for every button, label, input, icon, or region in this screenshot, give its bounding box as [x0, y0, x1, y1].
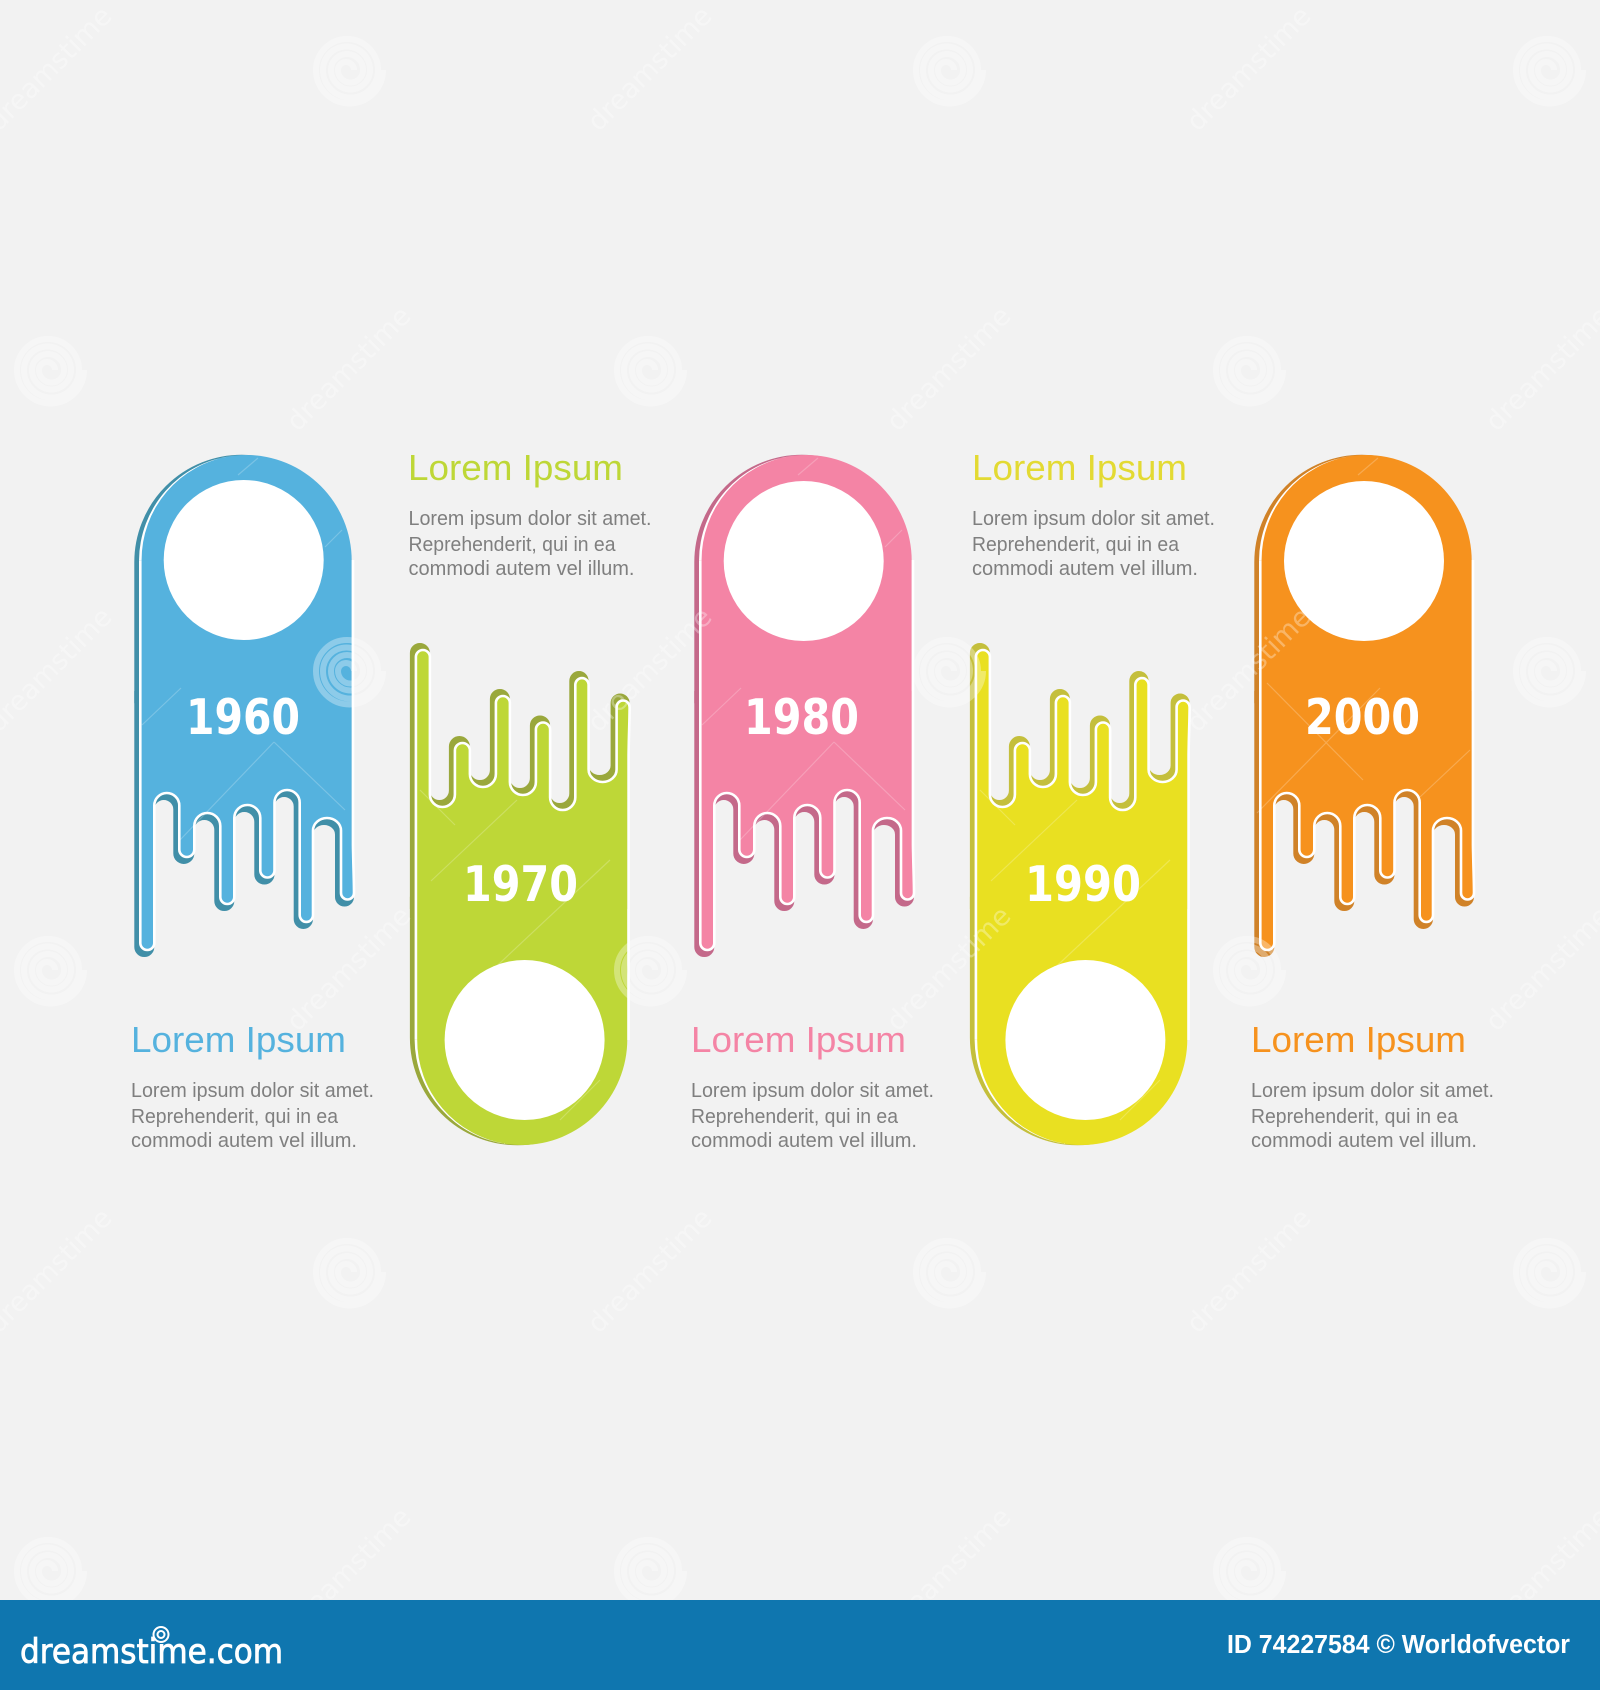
- watermark text: dreamstime: [582, 602, 718, 738]
- heading 1960: Lorem Ipsum: [131, 1019, 346, 1060]
- white circle 1990: [1005, 960, 1165, 1120]
- panel: 1980 pink drip tag: [696, 455, 914, 954]
- body 1970: [408, 508, 652, 580]
- blue drip shape: [136, 455, 354, 954]
- white circle 1980: [724, 481, 884, 641]
- year 1970: 1970: [463, 856, 578, 913]
- year 2000: 2000: [1305, 689, 1420, 746]
- body 1980: Lorem ipsum dolor sit amet.: [691, 1080, 934, 1102]
- year 1980: 1980: [744, 689, 859, 746]
- white circle 1960: [164, 480, 324, 640]
- body 1960: commodi autem vel illum.: [131, 1130, 357, 1152]
- watermark text: dreamstime: [1181, 602, 1317, 738]
- watermark text: dreamstime: [1181, 1203, 1317, 1339]
- year 1990: 1990: [1025, 856, 1141, 913]
- watermark text: dreamstime: [881, 1502, 1017, 1638]
- body 1970: commodi autem vel illum.: [408, 558, 634, 580]
- watermark text: dreamstime: [881, 901, 1017, 1037]
- body 1970: Lorem ipsum dolor sit amet.: [408, 508, 652, 530]
- watermark text: dreamstime: [281, 1502, 417, 1638]
- body 1990: Reprehenderit, qui in ea: [972, 534, 1180, 556]
- watermark text: dreamstime: [281, 901, 417, 1037]
- body 2000: [1251, 1080, 1494, 1152]
- body 1960: Lorem ipsum dolor sit amet.: [131, 1080, 374, 1102]
- body 1960: Reprehenderit, qui in ea: [131, 1106, 339, 1128]
- watermark text: dreamstime: [582, 1, 718, 137]
- body 1990: [972, 508, 1215, 580]
- panel: 2000 orange drip tag: [1256, 455, 1474, 954]
- text block: 1970: [408, 447, 652, 580]
- text block: 2000: [1251, 1019, 1494, 1152]
- text block: 1960: [131, 1019, 374, 1152]
- yellow drip shape: [972, 646, 1190, 1145]
- pink drip shape: [696, 455, 914, 954]
- body 1980: Reprehenderit, qui in ea: [691, 1106, 899, 1128]
- body 1960: [131, 1080, 374, 1152]
- icon: logo spiral: [154, 1627, 168, 1642]
- panel: 1960 blue drip tag: [136, 455, 354, 954]
- year 1960: 1960: [186, 689, 300, 746]
- panel: 1990 yellow drip tag: [972, 646, 1190, 1145]
- text block: 1980: [691, 1019, 934, 1152]
- body 2000: Reprehenderit, qui in ea: [1251, 1106, 1459, 1128]
- heading 1990: Lorem Ipsum: [972, 447, 1187, 488]
- panel: 1970 green drip tag: [412, 646, 630, 1145]
- watermark text: dreamstime: [281, 301, 417, 437]
- white circle 2000: [1284, 481, 1444, 641]
- body 1990: commodi autem vel illum.: [972, 558, 1198, 580]
- heading 1980: Lorem Ipsum: [691, 1019, 906, 1060]
- footer bar: [0, 1600, 1600, 1690]
- watermark text: dreamstime: [1181, 1, 1317, 137]
- heading 1970: Lorem Ipsum: [408, 447, 623, 488]
- white circle 1970: [445, 960, 605, 1120]
- orange drip shape: [1256, 455, 1474, 954]
- watermark text: dreamstime: [582, 1203, 718, 1339]
- body 1980: [691, 1080, 934, 1152]
- watermark lattice lines: [142, 458, 1470, 1120]
- body 1970: Reprehenderit, qui in ea: [408, 534, 616, 556]
- watermark text: dreamstime: [881, 301, 1017, 437]
- body 2000: Lorem ipsum dolor sit amet.: [1251, 1080, 1494, 1102]
- green drip shape: [412, 646, 630, 1145]
- text block: 1990: [972, 447, 1215, 580]
- footer logo text: dreamstime.com: [20, 1632, 283, 1672]
- footer credit: ID 74227584 © Worldofvector: [1227, 1631, 1570, 1659]
- body 1980: commodi autem vel illum.: [691, 1130, 917, 1152]
- body 2000: commodi autem vel illum.: [1251, 1130, 1477, 1152]
- heading 2000: Lorem Ipsum: [1251, 1019, 1466, 1060]
- body 1990: Lorem ipsum dolor sit amet.: [972, 508, 1215, 530]
